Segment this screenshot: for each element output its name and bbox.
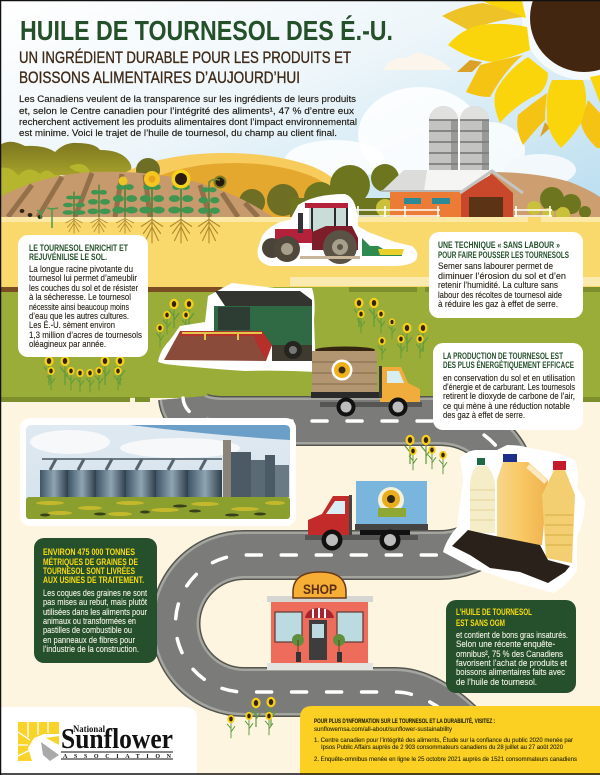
panel: processing card [34, 538, 157, 663]
panel: soil card [18, 235, 148, 357]
references heading: POUR PLUS D’INFORMATION SUR LE TOURNESOL ET LA DURABILITÉ, VISITEZ : [314, 717, 495, 725]
text: no-till: retenir l’humidité. La culture sans [438, 280, 558, 290]
text: soil: d’eau que les autres cultures. [29, 311, 129, 321]
text: energy: retirent le dioxyde de carbone de l’air, [443, 391, 575, 401]
heading: non-GMO: EST SANS OGM [456, 618, 505, 629]
text: soil: 1,3 million d’acres de tournesols [29, 330, 142, 340]
text: non-GMO [456, 630, 568, 687]
text: energy [443, 373, 575, 420]
striped brown hill [0, 172, 273, 217]
text: soil: les couches du sol et de résister [29, 283, 138, 293]
panel: no-till card [429, 232, 583, 318]
icon: shop: SHOP [303, 581, 337, 597]
footnotes: 2. Enquête-omnibus menée en ligne le 25 octobre 2021 auprès de 1521 consommateurs canadiens [314, 757, 577, 763]
text: soil [29, 264, 142, 349]
text: processing: utilisées dans les aliments pour [43, 607, 147, 617]
text: processing [43, 588, 147, 654]
road [175, 398, 512, 735]
right tan hill [490, 172, 600, 217]
footnotes: 1. Centre canadien pour l’intégrité des aliments, Étude sur la confiance du public 2020 menée par [314, 737, 573, 744]
heading: non-GMO [456, 607, 532, 629]
sunflower large top right [442, 0, 600, 148]
heading: processing: AUX USINES DE TRAITEMENT. [43, 575, 144, 586]
logo wordmark: ASSOCIATION [63, 754, 172, 760]
sunflower growth stages [20, 170, 226, 243]
panel: non-GMO card [446, 600, 576, 693]
icon: logo sun [18, 722, 59, 761]
small sunflowers above truck [354, 298, 428, 360]
photo: grain elevators [20, 418, 296, 526]
references link: sunflowernsa.com/all-about/sunflower-sustainability [314, 727, 452, 733]
landscape hills [0, 142, 600, 247]
subtitle: BOISSONS ALIMENTAIRES D’AUJOURD’HUI [19, 69, 300, 87]
icon: wooden truck [311, 346, 422, 416]
text: non-GMO: Selon une récente enquête- [456, 639, 555, 649]
text: non-GMO: omnibus², 75 % des Canadiens [456, 649, 563, 659]
text: no-till: diminuer l’érosion du sol et d’en [438, 271, 566, 281]
sky [0, 0, 600, 220]
icon: tractor [258, 194, 417, 266]
text: soil: tournesol lui permet d’ameublir [29, 273, 137, 283]
heading: soil [29, 243, 128, 263]
intro text: recherchent activement les produits alimentaires dont l’impact environnemental [19, 117, 357, 128]
text: energy: en conservation du sol et en utilisation [443, 373, 575, 383]
heading: processing: ENVIRON 475 000 TONNES [43, 547, 135, 558]
intro text: est minime. Voici le trajet de l’huile de tournesol, du champ au client final. [19, 128, 337, 139]
centre and right bushes [290, 164, 591, 218]
panel: references [300, 706, 600, 775]
logo wordmark: Sunflower [61, 723, 173, 755]
heading: non-GMO: L’HUILE DE TOURNESOL [456, 607, 532, 618]
text: processing: Les coques des graines ne sont [43, 588, 147, 598]
panel: energy card [433, 343, 583, 430]
icon: fences [355, 206, 552, 218]
heading: energy [443, 351, 574, 371]
heading: soil: REJUVÉNILISE LE SOL. [29, 251, 107, 263]
intro text [19, 94, 357, 139]
intro text: et, selon le Centre canadien pour l’intégrité des aliments¹, 47 % d’entre eux [19, 106, 354, 117]
text: processing: l’industrie de la construction. [43, 644, 139, 654]
heading: soil: LE TOURNESOL ENRICHIT ET [29, 243, 128, 254]
icon: shop [267, 572, 373, 670]
icon: barn [381, 170, 523, 218]
icon: grain silos [429, 106, 489, 170]
left bushes [0, 142, 131, 175]
icon: blue delivery truck [305, 481, 428, 550]
text: non-GMO: de l’huile de tournesol. [456, 677, 537, 687]
text: no-till [438, 261, 566, 309]
logo wordmark: National [73, 724, 105, 734]
subtitle [19, 48, 351, 87]
light bushes [0, 164, 90, 205]
icon: combine harvester [158, 283, 316, 372]
small sunflowers beside road [405, 435, 447, 474]
small sunflowers bottom road [227, 697, 276, 738]
title: HUILE DE TOURNESOL DES É.-U. [20, 15, 393, 46]
text: energy: des gaz à effet de serre. [443, 410, 525, 420]
footnotes: Ipsos Public Affairs auprès de 2 903 consommateurs canadiens du 28 juillet au 27 août 2020 [321, 745, 564, 751]
clouds [285, 52, 576, 186]
small sunflowers near combine [156, 299, 194, 347]
text: processing: en panneaux de fibres pour [43, 635, 135, 645]
text: energy: ce qui mène à une réduction notable [443, 401, 570, 411]
text: soil: nécessite ainsi beaucoup moins [29, 302, 129, 312]
text: no-till: Semer sans labourer permet de [438, 261, 553, 271]
footnotes [314, 737, 577, 763]
green field [0, 287, 600, 402]
text: processing: animaux ou transformées en [43, 616, 136, 626]
soil band [0, 217, 600, 287]
text: non-GMO: et contient de bons gras insaturés. [456, 630, 568, 640]
hill bush [136, 158, 299, 216]
gold hill [110, 153, 340, 231]
subtitle: UN INGRÉDIENT DURABLE POUR LES PRODUITS ET [19, 48, 351, 67]
text: processing: pas mises au rebut, mais plutôt [43, 597, 147, 607]
panel: logo [0, 707, 197, 775]
heading: processing [43, 547, 144, 586]
text: processing: pastilles de combustible ou [43, 625, 132, 635]
text: non-GMO: favorisent l’achat de produits et [456, 658, 567, 668]
heading: no-till [438, 240, 569, 261]
heading: processing: MÉTRIQUES DE GRAINES DE [43, 556, 138, 568]
text: no-till: à réduire les gaz à effet de serre. [438, 299, 558, 309]
text: soil: La longue racine pivotante du [29, 264, 133, 274]
text: no-till: labour des récoltes de tournesol aide [438, 290, 562, 300]
intro text: Les Canadiens veulent de la transparence sur les ingrédients de leurs produits [19, 94, 356, 105]
text: soil: Les É.-U. sèment environ [29, 320, 115, 330]
heading: processing: TOURNESOL SONT LIVRÉES [43, 565, 135, 577]
text: soil: oléagineux par année. [29, 339, 106, 349]
icon: oil bottles and seeds [443, 445, 585, 593]
text: non-GMO: boissons alimentaires faits avec [456, 667, 565, 677]
small sunflowers under first card [44, 356, 125, 392]
text: soil: à la sécheresse. Le tournesol [29, 292, 131, 302]
